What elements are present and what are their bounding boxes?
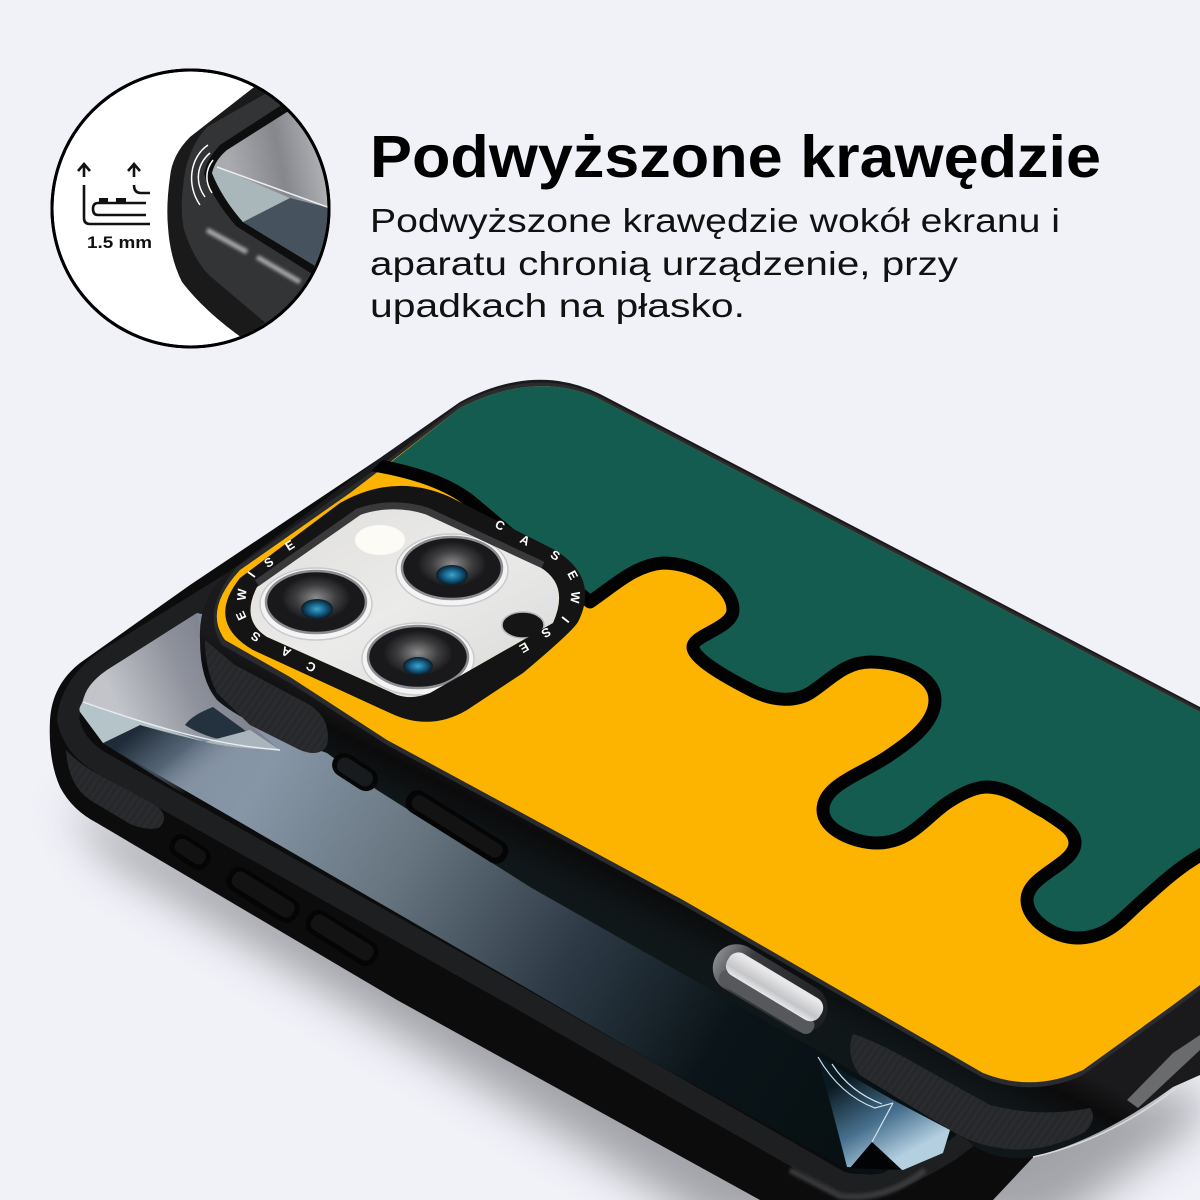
screen curve highlight	[205, 730, 280, 750]
brand letters: CASEWISE: I	[245, 569, 258, 580]
inset circle: raised edge close-up	[52, 70, 345, 347]
back phone corner patch	[66, 750, 164, 829]
brand letters: CASEWISE: E	[564, 568, 581, 582]
brand letters: CASEWISE: S	[548, 547, 562, 564]
brand letters: CASEWISE: E	[233, 609, 249, 622]
front phone case	[200, 380, 1200, 1158]
title: Podwyższone krawędzie	[370, 124, 1101, 190]
screen dark band under curve	[103, 725, 340, 830]
side patch top-left	[205, 640, 328, 753]
screen dark wedge	[185, 707, 265, 745]
case side wall	[200, 380, 1200, 1158]
icon: volume down button	[301, 906, 383, 970]
brand letters: CASEWISE: S	[249, 628, 263, 645]
back phone screen	[80, 613, 1000, 1175]
case back: green wave area	[385, 386, 1200, 938]
brand letters: CASEWISE: C	[304, 658, 318, 675]
icon: mute button	[165, 830, 215, 874]
icon: raised edge diagram	[78, 164, 150, 224]
flash	[355, 525, 405, 555]
phone drop shadow	[65, 800, 1200, 1200]
side patch bottom	[850, 1034, 1093, 1150]
camera module	[225, 486, 585, 722]
brand letters: CASEWISE: A	[279, 643, 293, 660]
description text: aparatu chronią urządzenie, przy	[370, 245, 959, 282]
back phone front bevel	[68, 578, 1000, 1185]
brand letters: CASEWISE: I	[559, 614, 572, 625]
wallpaper light lines	[818, 1057, 893, 1142]
description text	[370, 202, 1060, 324]
brand letters: CASEWISE: W	[235, 588, 250, 601]
screen reflection gray	[83, 613, 280, 750]
camera plate	[250, 508, 559, 697]
camera ring	[225, 486, 585, 722]
description text: Podwyższone krawędzie wokół ekranu i	[370, 202, 1060, 239]
lens left	[260, 568, 372, 640]
microphone hole	[502, 612, 544, 638]
back phone in black case	[50, 458, 1040, 1200]
lens bottom	[362, 623, 474, 695]
icon: volume up button	[222, 863, 304, 927]
brand letters: CASEWISE: S	[539, 624, 553, 641]
back phone bottom highlight	[790, 1170, 925, 1197]
brand letters: CASEWISE: A	[518, 532, 532, 549]
icon: silver button recess	[704, 935, 837, 1041]
wallpaper black triangle	[850, 1142, 902, 1170]
lens top	[396, 534, 508, 606]
back phone frame	[50, 458, 1040, 1200]
description text: upadkach na płasko.	[370, 287, 745, 324]
brand letters: CASEWISE: S	[262, 554, 276, 571]
label: 1.5 mm: 1.5 mm	[87, 233, 152, 252]
brand letters: CASEWISE: E	[283, 537, 297, 554]
case rim	[214, 382, 1200, 1087]
speaker grille area	[1127, 1035, 1200, 1108]
case back: yellow face	[217, 386, 1200, 1082]
case corner highlight	[1033, 1085, 1180, 1157]
brand letters: CASEWISE: E	[517, 639, 531, 656]
brand letters: CASEWISE	[233, 517, 582, 675]
port opening	[327, 748, 383, 796]
screen reflection light	[79, 702, 205, 743]
brand letters: CASEWISE: W	[567, 591, 582, 604]
icon: side button	[401, 786, 513, 868]
brand letters: CASEWISE: C	[493, 517, 507, 534]
wave black outline	[360, 463, 1200, 938]
screen wallpaper glow	[818, 1057, 950, 1170]
camera ring inner bevel	[257, 506, 543, 583]
